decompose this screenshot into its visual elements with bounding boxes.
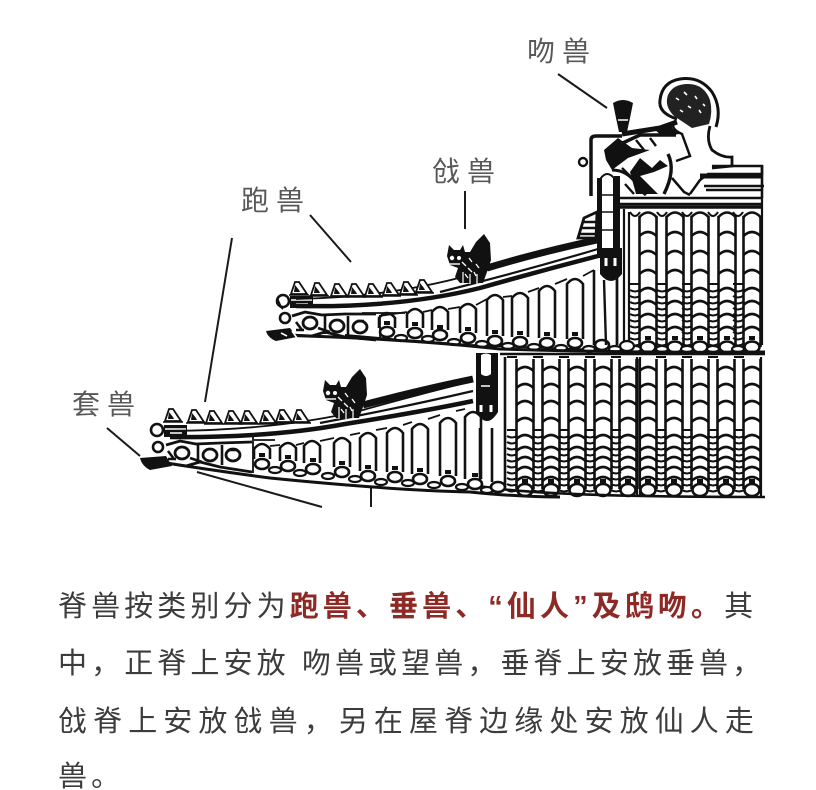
upper ridge beast 戗兽: [447, 234, 491, 284]
upper vertical pier: [578, 174, 622, 345]
upper running beasts: [289, 280, 434, 297]
leader lines: [107, 74, 607, 507]
wen beast ridge ornament 吻兽: [579, 79, 764, 198]
text line 3: 戗脊上安放戗兽，另在屋脊边缘处安放仙人走: [58, 706, 760, 738]
label: 戗兽: 戗兽: [432, 156, 502, 187]
lower eave end with hanging beast: [140, 424, 252, 472]
lower ridge bands: [170, 379, 473, 437]
text line 1: 脊兽按类别分为跑兽、垂兽、“仙人”及鸱吻。其: [58, 591, 757, 623]
text line 2: 中，正脊上安放 吻兽或望兽，垂脊上安放垂兽，: [58, 648, 765, 680]
roof diagram: [72, 36, 765, 508]
upper eave end with hanging beast: [266, 295, 376, 341]
label: 跑兽: 跑兽: [241, 185, 311, 216]
paragraph text: [58, 590, 765, 790]
lower ridge beast 戗兽: [323, 369, 367, 419]
lower vertical pier: [476, 353, 498, 421]
upper ridge bands: [296, 240, 598, 306]
lower running beasts: [163, 409, 311, 424]
lower roof tiles: [470, 354, 765, 497]
upper roof tiles: [620, 165, 763, 352]
upper eave: [270, 268, 765, 352]
label: 吻兽: 吻兽: [527, 36, 597, 67]
lower eave: [160, 357, 560, 497]
label: 套兽: 套兽: [72, 389, 142, 420]
